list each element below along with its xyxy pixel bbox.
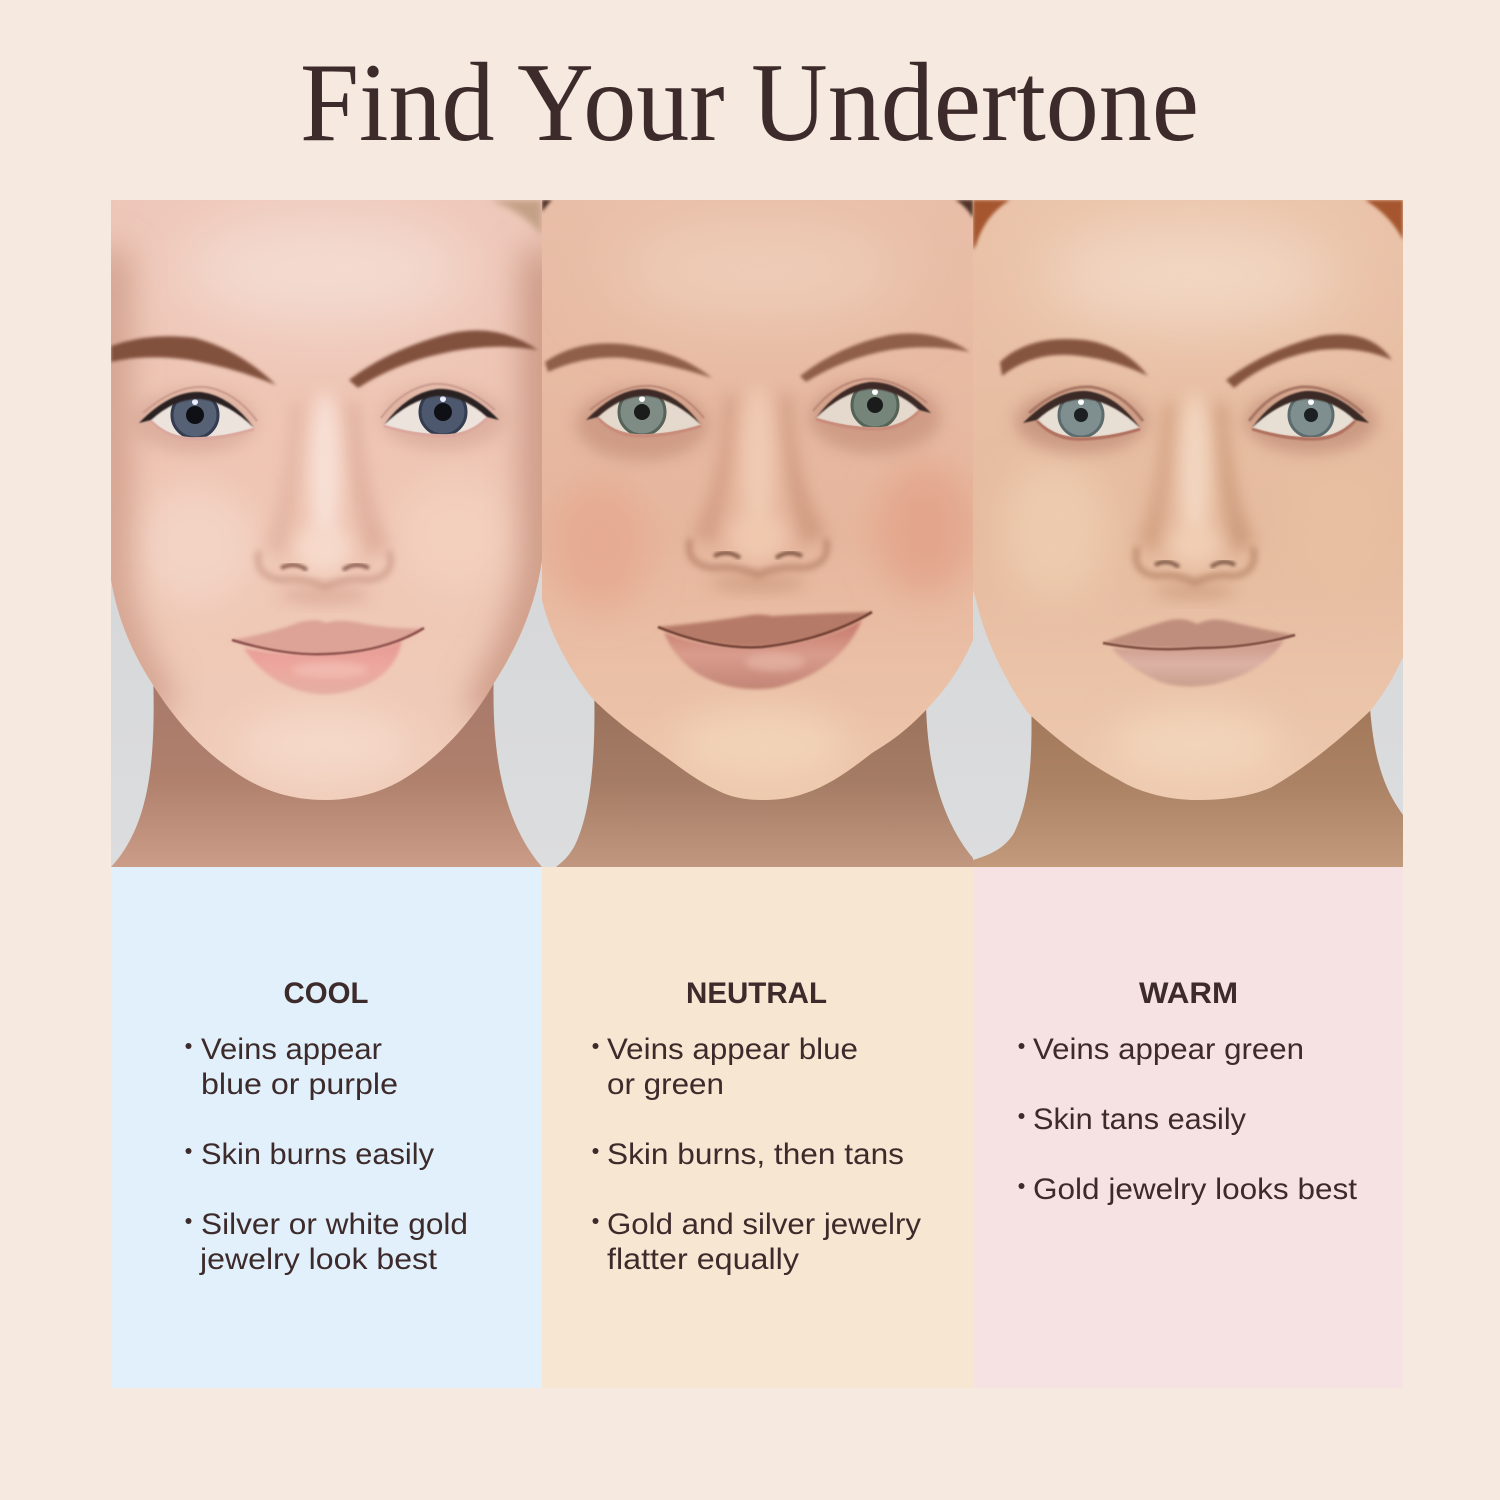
- panel: neutral face portrait: [542, 200, 973, 867]
- text block: cool traits: blue or purple: [201, 1068, 398, 1101]
- eyebrows: [545, 333, 970, 382]
- left eye: [576, 386, 708, 460]
- text block: warm traits: [1018, 1033, 1358, 1206]
- text block: warm traits: Veins appear green: [1033, 1033, 1304, 1066]
- text block: cool traits: Silver or white gold: [201, 1208, 468, 1241]
- nose: [1136, 393, 1255, 599]
- heading: warm: WARM: [1139, 977, 1238, 1010]
- lips: [658, 612, 872, 689]
- lips: [232, 620, 424, 694]
- hair strands: [542, 200, 973, 218]
- panel: warm face portrait: [973, 200, 1403, 867]
- face shape: [973, 200, 1403, 810]
- text block: cool traits: Skin burns easily: [201, 1138, 434, 1171]
- panel: warm: [973, 867, 1403, 1388]
- text block: neutral traits: Gold and silver jewelry: [607, 1208, 921, 1241]
- text block: neutral traits: Skin burns, then tans: [607, 1138, 904, 1171]
- text block: neutral traits: or green: [607, 1068, 724, 1101]
- text block: neutral traits: Veins appear blue: [607, 1033, 858, 1066]
- neck: [556, 700, 973, 867]
- nose: [689, 385, 828, 591]
- text block: warm traits: Skin tans easily: [1033, 1103, 1246, 1136]
- text block: neutral traits: [592, 1033, 921, 1276]
- text block: cool traits: jewelry look best: [199, 1243, 438, 1276]
- eyebrows: [1000, 334, 1392, 388]
- title: Find Your Undertone: [300, 41, 1199, 165]
- text block: warm traits: Gold jewelry looks best: [1033, 1173, 1358, 1206]
- face shape: [111, 200, 542, 810]
- text block: cool traits: [186, 1033, 468, 1276]
- face shape: [542, 200, 973, 810]
- lips: [1103, 619, 1295, 687]
- hair strands: [973, 200, 1403, 250]
- right eye: [1245, 387, 1377, 453]
- eyebrows: [111, 330, 538, 388]
- panel: neutral: [542, 867, 973, 1388]
- heading: neutral: NEUTRAL: [686, 977, 827, 1010]
- panel: cool: [111, 867, 542, 1388]
- text block: cool traits: Veins appear: [201, 1033, 382, 1066]
- text block: neutral traits: flatter equally: [607, 1243, 799, 1276]
- neck: [111, 670, 542, 867]
- neck: [973, 710, 1403, 867]
- left eye: [133, 387, 257, 453]
- heading: cool: COOL: [284, 977, 368, 1010]
- right eye: [809, 379, 941, 453]
- left eye: [1015, 387, 1147, 453]
- hair strands: [494, 200, 542, 234]
- right eye: [381, 384, 505, 450]
- nose: [258, 392, 391, 603]
- panel: cool face portrait: [111, 200, 542, 867]
